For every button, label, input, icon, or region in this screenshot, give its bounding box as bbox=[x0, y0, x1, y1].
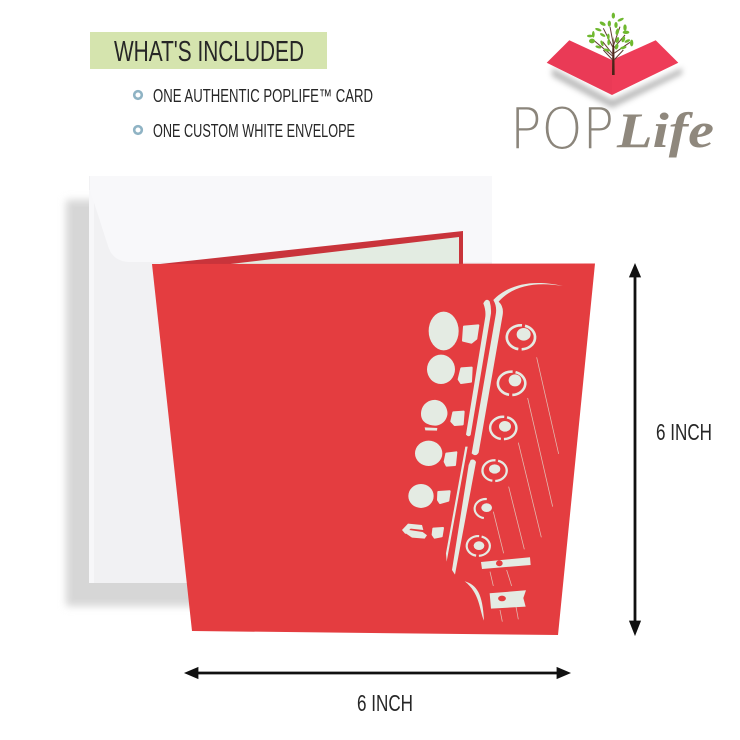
bridge plates bbox=[481, 557, 531, 609]
item: card: ONE AUTHENTIC POPLIFE™ CARD bbox=[153, 85, 373, 106]
item: card bbox=[134, 85, 373, 106]
peg shafts bbox=[433, 325, 478, 538]
post 4 bbox=[482, 460, 507, 481]
post 3 bbox=[490, 417, 516, 439]
label: height: 6 INCH bbox=[656, 419, 712, 445]
logo wordmark bbox=[510, 97, 714, 162]
nut and fretboard rails bbox=[446, 283, 563, 621]
arrow: height bbox=[630, 264, 640, 635]
list of included items bbox=[134, 85, 373, 141]
post 5 bbox=[475, 499, 492, 518]
post 2 bbox=[498, 372, 525, 395]
logo wordmark: Life bbox=[616, 102, 714, 158]
post 6 bbox=[467, 536, 490, 556]
card inside bbox=[160, 231, 463, 265]
logo wordmark: POP bbox=[510, 97, 614, 162]
tuning pegs bbox=[402, 312, 459, 539]
icon: tree bbox=[587, 13, 633, 75]
envelope shadow bbox=[66, 200, 216, 606]
envelope body bbox=[89, 176, 492, 583]
item: envelope bbox=[134, 120, 355, 141]
tuning posts bbox=[467, 325, 535, 556]
heading: what's included bbox=[90, 32, 327, 69]
strings bbox=[490, 357, 559, 622]
post 1 bbox=[507, 325, 535, 349]
heading: what's included: WHAT'S INCLUDED bbox=[114, 36, 304, 68]
envelope flap bbox=[90, 176, 492, 262]
item: envelope: ONE CUSTOM WHITE ENVELOPE bbox=[153, 120, 355, 141]
label: width: 6 INCH bbox=[357, 690, 413, 716]
guitar headstock cutouts bbox=[402, 283, 563, 622]
logo: poplife bbox=[510, 13, 714, 162]
logo book bbox=[547, 40, 678, 95]
arrow: width bbox=[185, 668, 570, 678]
envelope side seam bbox=[89, 190, 94, 583]
card front bbox=[152, 264, 595, 635]
logo shadow bbox=[552, 68, 682, 108]
envelope bbox=[66, 176, 492, 606]
